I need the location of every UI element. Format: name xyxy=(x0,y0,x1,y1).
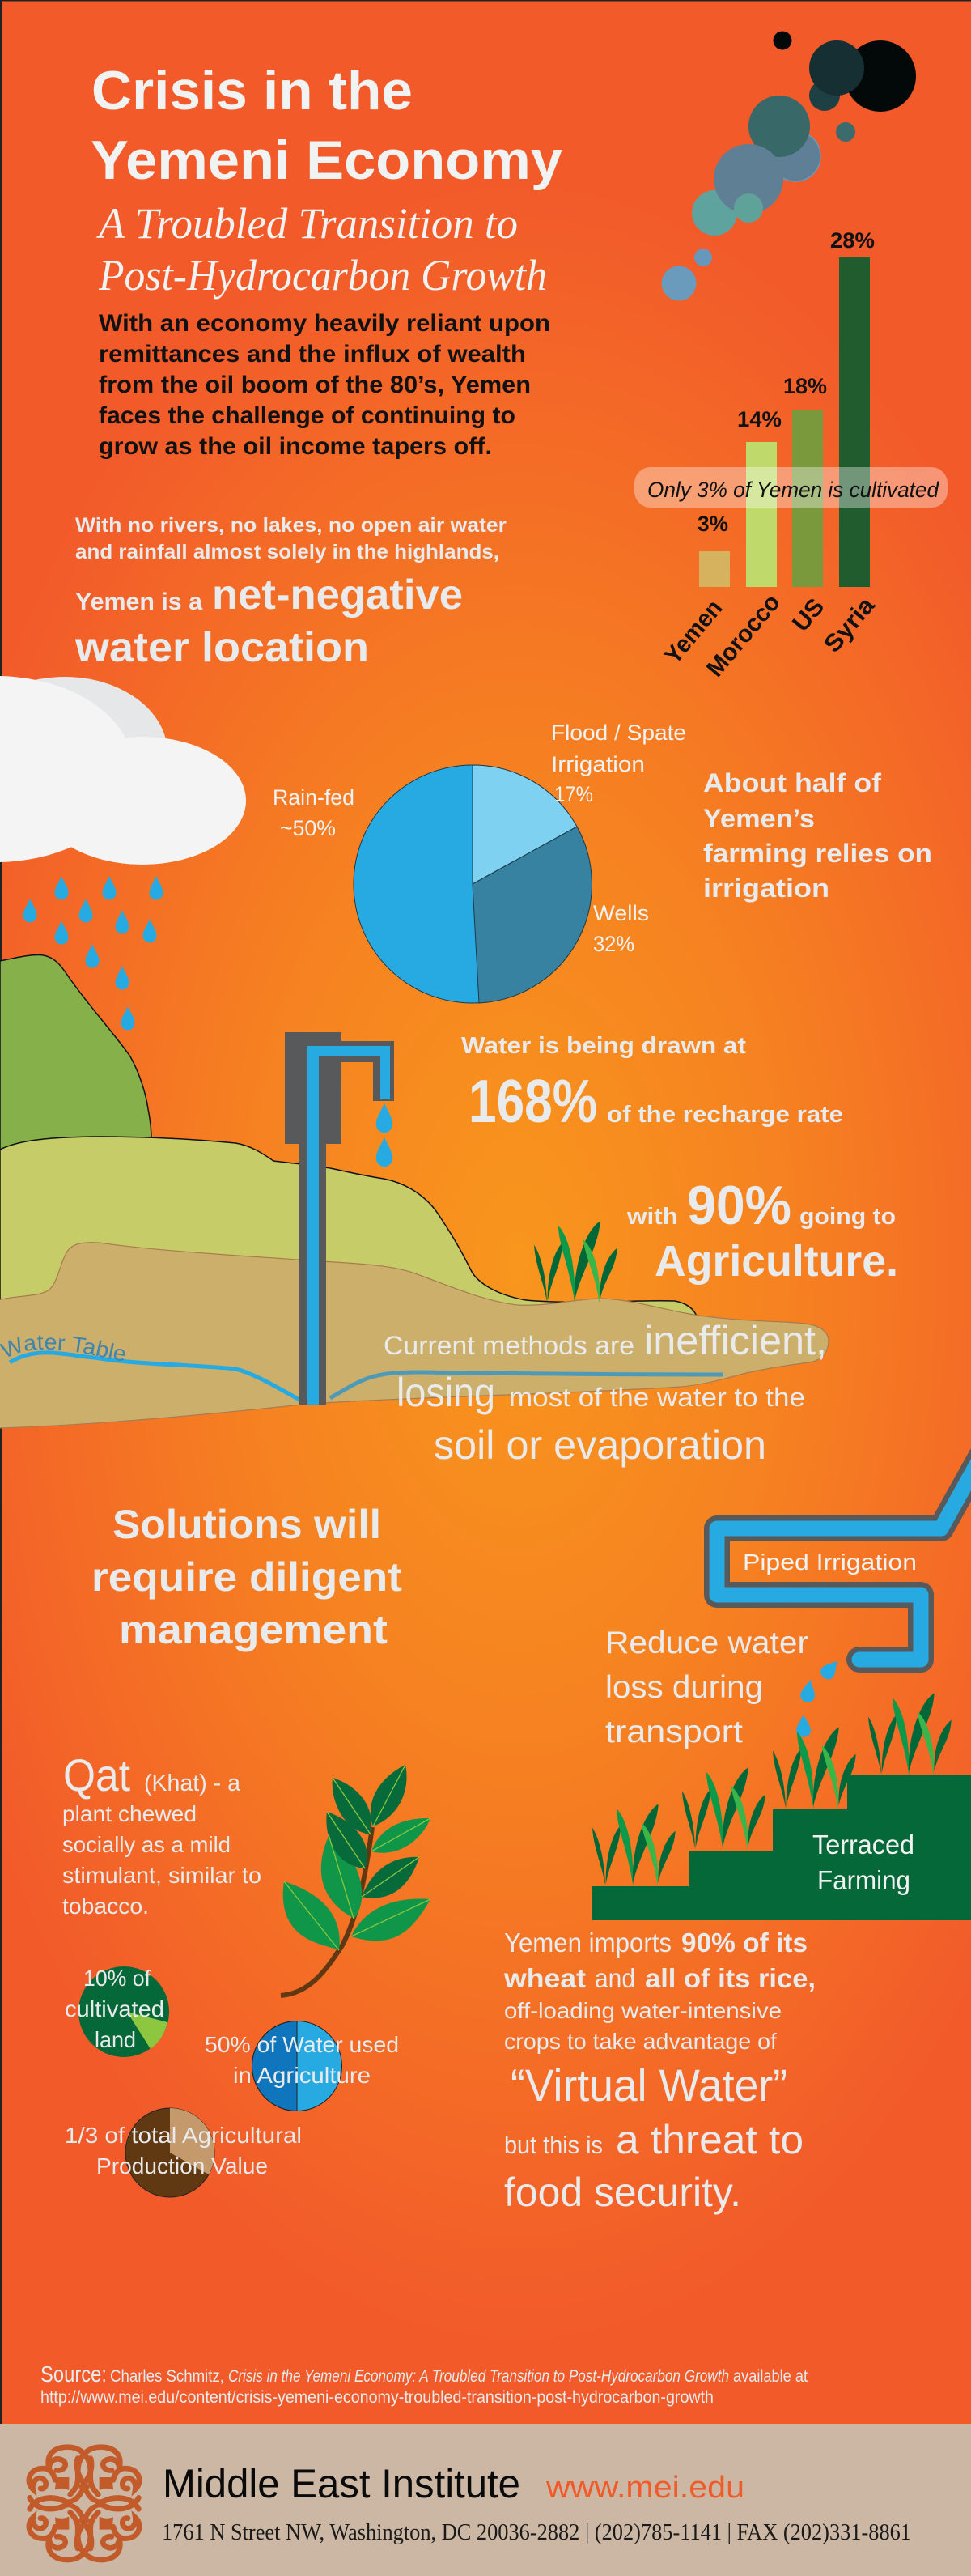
source citation: Crisis in the Yemeni Economy: A Troubled Transition to Post-Hydrocarbon Growth xyxy=(228,2367,729,2386)
qat description: tobacco. xyxy=(62,1894,149,1919)
subtitle: Post-Hydrocarbon Growth xyxy=(98,251,547,300)
pie labels: Wells xyxy=(593,901,649,925)
icon: cloud xyxy=(0,676,246,865)
terraced farming steps: Terraced xyxy=(812,1830,914,1860)
intro text xyxy=(99,310,550,460)
agriculture text: Agriculture. xyxy=(655,1237,898,1286)
organization name: Middle East Institute xyxy=(163,2461,520,2506)
reduce water loss text xyxy=(605,1626,808,1749)
callout: only 3% cultivated: Only 3% of Yemen is cultivated xyxy=(647,478,939,502)
bubbles xyxy=(662,31,916,301)
inefficiency text: losing xyxy=(396,1370,495,1415)
water location text: With no rivers, no lakes, no open air water xyxy=(75,514,507,537)
icon: rain drops xyxy=(23,876,163,1030)
virtual water text: wheat xyxy=(503,1963,586,1993)
inefficiency text: most of the water to the xyxy=(509,1383,805,1412)
mini pie: 50% of water xyxy=(205,2021,399,2111)
mini pie: 10% of cultivated land xyxy=(65,1966,169,2057)
icon: well drops xyxy=(376,1103,392,1167)
bar chart: cultivated land: Yemen xyxy=(659,595,727,669)
source citation xyxy=(40,2361,808,2407)
inefficiency text: inefficient, xyxy=(644,1318,827,1363)
bar chart: cultivated land: Morocco xyxy=(702,589,786,682)
mini pie: 10% of cultivated land: land xyxy=(95,2027,136,2052)
mini pie: 50% of water: in Agriculture xyxy=(233,2063,371,2088)
virtual water text: off-loading water-intensive xyxy=(504,1998,782,2023)
irrigation text: About half of xyxy=(703,768,881,797)
agriculture text: 90% xyxy=(687,1175,791,1236)
subtitle: A Troubled Transition to xyxy=(96,199,518,248)
bar chart: cultivated land: 18% xyxy=(783,374,827,398)
irrigation text: Yemen’s xyxy=(703,804,815,833)
recharge rate text: of the recharge rate xyxy=(607,1102,843,1128)
agriculture text xyxy=(626,1175,898,1286)
intro text: faces the challenge of continuing to xyxy=(99,402,515,429)
well pump xyxy=(285,1032,394,1405)
logo: Middle East Institute knot xyxy=(29,2447,139,2560)
water table line xyxy=(10,1353,723,1400)
icon: terrace crops xyxy=(592,1693,952,1886)
bar chart: cultivated land: Syria xyxy=(819,592,880,657)
virtual water text: a threat to xyxy=(616,2117,804,2162)
water location text xyxy=(74,514,507,671)
irrigation text: irrigation xyxy=(703,874,829,903)
intro text: from the oil boom of the 80’s, Yemen xyxy=(99,372,531,398)
mini pie: 10% of cultivated land: 10% of xyxy=(83,1966,151,1991)
mini pie: 1/3 of production value: Production Value xyxy=(96,2153,268,2179)
title: Crisis in the xyxy=(91,60,413,121)
subtitle xyxy=(96,199,547,300)
icon: grass xyxy=(534,1221,617,1303)
inefficiency text xyxy=(384,1318,827,1468)
water location text: water location xyxy=(74,624,369,671)
virtual water text: Yemen imports xyxy=(504,1928,672,1958)
qat description: stimulant, similar to xyxy=(62,1863,261,1888)
reduce water loss text: transport xyxy=(605,1715,743,1749)
qat description: socially as a mild xyxy=(62,1832,231,1857)
bar chart: cultivated land: US xyxy=(787,593,829,636)
virtual water text: “Virtual Water” xyxy=(511,2060,787,2111)
callout: only 3% cultivated xyxy=(634,467,948,508)
reduce water loss text: Reduce water xyxy=(605,1626,808,1660)
bar chart: cultivated land: 14% xyxy=(737,407,782,431)
virtual water text: crops to take advantage of xyxy=(504,2029,777,2054)
mini pie: 50% of water: 50% of Water used xyxy=(205,2032,399,2057)
terraced farming steps xyxy=(592,1775,971,1920)
qat description: plant chewed xyxy=(62,1801,197,1826)
source citation: available at xyxy=(733,2367,808,2386)
title: Yemeni Economy xyxy=(91,130,562,191)
bar chart: cultivated land: 3% xyxy=(698,512,728,536)
agriculture text: going to xyxy=(799,1204,896,1230)
pie labels: Rain-fed xyxy=(273,785,354,810)
water table label: Water Table xyxy=(0,1335,125,1361)
terraced farming steps: Farming xyxy=(817,1865,910,1895)
solutions heading: require diligent xyxy=(91,1554,402,1600)
inefficiency text: soil or evaporation xyxy=(434,1422,766,1468)
mini pie: 1/3 of production value xyxy=(65,2108,302,2197)
pie labels: ~50% xyxy=(280,816,336,840)
water location text: Yemen is a xyxy=(75,589,202,615)
piped irrigation label: Piped Irrigation xyxy=(743,1549,917,1575)
virtual water text: food security. xyxy=(504,2170,741,2215)
icon: qat branch xyxy=(281,1765,430,1996)
virtual water text: 90% of its xyxy=(681,1928,808,1958)
virtual water text: but this is xyxy=(504,2131,603,2159)
water table label xyxy=(0,1335,125,1361)
qat description xyxy=(62,1749,261,1919)
address: 1761 N Street NW, Washington, DC 20036-2882 | (202)785-1141 | FAX (202)331-8861 xyxy=(162,2520,911,2545)
water location text: and rainfall almost solely in the highlands, xyxy=(75,541,499,563)
icon: irrigation pipe xyxy=(717,1457,971,1660)
virtual water text: all of its rice, xyxy=(645,1963,816,1993)
source citation: Source: xyxy=(40,2361,107,2387)
recharge rate text xyxy=(461,1033,843,1135)
pie labels: 17% xyxy=(554,782,593,806)
pie labels: Irrigation xyxy=(551,752,645,776)
icon: pipe drops xyxy=(796,1656,843,1737)
website: www.mei.edu xyxy=(545,2471,744,2505)
agriculture text: with xyxy=(626,1204,678,1230)
qat description: (Khat) - a xyxy=(144,1770,241,1796)
landscape: hills and ground xyxy=(0,955,829,1428)
title xyxy=(91,60,562,191)
footer band xyxy=(0,2424,971,2576)
irrigation text: farming relies on xyxy=(703,839,932,868)
solutions heading: management xyxy=(119,1607,388,1652)
intro text: remittances and the influx of wealth xyxy=(99,341,526,368)
virtual water text xyxy=(503,1928,816,2215)
mini pie: 1/3 of production value: 1/3 of total Agricultural xyxy=(65,2123,302,2148)
virtual water text: and xyxy=(595,1963,635,1993)
water location text: net-negative xyxy=(212,572,463,618)
pie chart: irrigation share xyxy=(354,765,592,1003)
pie labels xyxy=(273,721,686,956)
solutions heading: Solutions will xyxy=(112,1502,381,1547)
pie labels: 32% xyxy=(593,932,634,956)
recharge rate text: 168% xyxy=(469,1067,597,1135)
irrigation text xyxy=(703,768,932,903)
source citation: http://www.mei.edu/content/crisis-yemeni-economy-troubled-transition-post-hydrocarbon-growth xyxy=(40,2388,714,2407)
inefficiency text: Current methods are xyxy=(384,1331,634,1360)
bar chart: cultivated land xyxy=(659,228,880,682)
intro text: grow as the oil income tapers off. xyxy=(99,433,492,460)
intro text: With an economy heavily reliant upon xyxy=(99,310,550,337)
source citation: Charles Schmitz, xyxy=(110,2367,224,2386)
mini pie: 10% of cultivated land: cultivated xyxy=(65,1996,164,2021)
solutions heading xyxy=(91,1502,402,1652)
recharge rate text: Water is being drawn at xyxy=(461,1033,746,1059)
bar chart: cultivated land: 28% xyxy=(830,228,875,253)
pie labels: Flood / Spate xyxy=(551,721,686,745)
reduce water loss text: loss during xyxy=(605,1670,763,1705)
qat description: Qat xyxy=(63,1749,130,1800)
